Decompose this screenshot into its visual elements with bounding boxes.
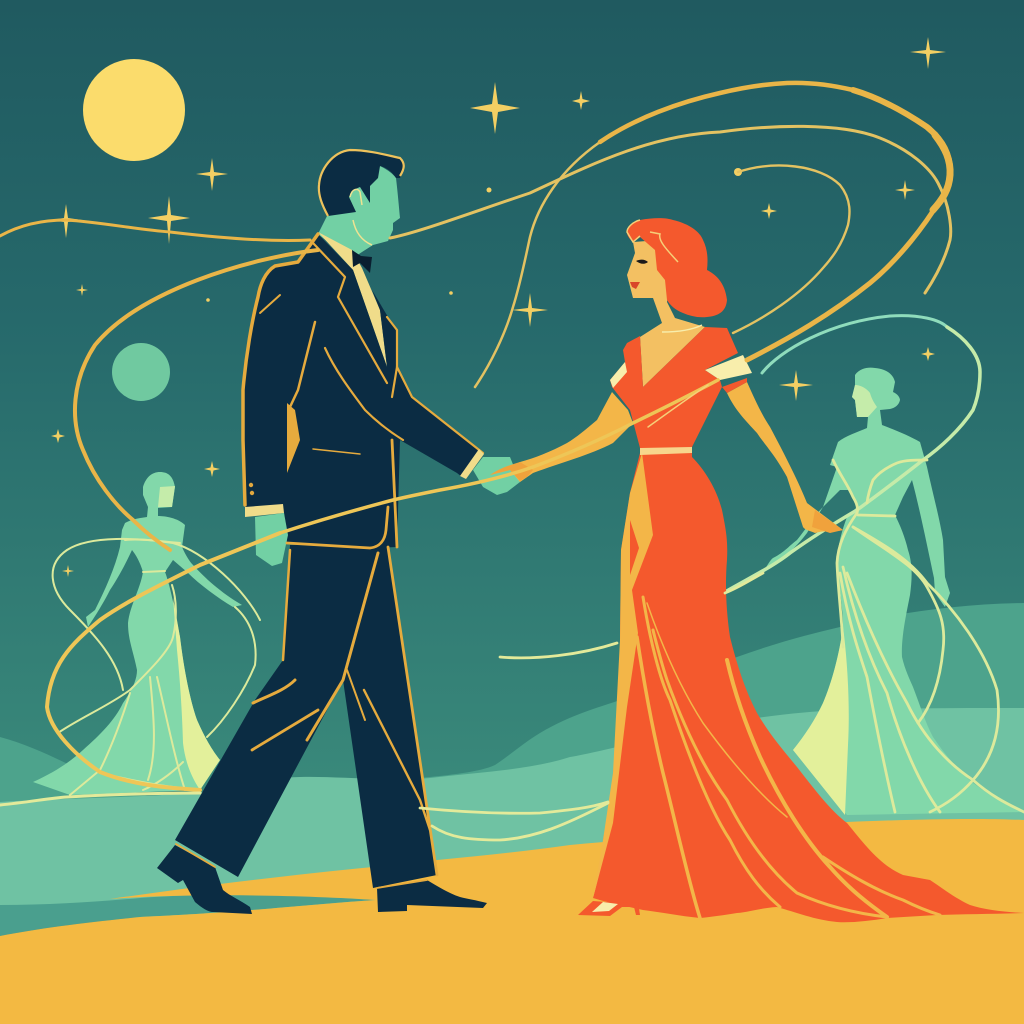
woman hair	[627, 218, 727, 317]
man trousers	[175, 545, 437, 888]
man neck and face	[318, 166, 400, 260]
man shirt collar	[318, 232, 387, 367]
man hands and cuff	[245, 483, 288, 566]
dress gold side panel	[593, 453, 653, 898]
woman hair highlight	[627, 220, 678, 262]
golden swirl lines	[0, 83, 951, 550]
man ear and jaw line	[350, 189, 372, 245]
man suit gold outlines	[176, 234, 483, 888]
rolling hills	[0, 603, 1024, 936]
man jacket	[243, 234, 483, 548]
woman skin: chest, neck and face	[627, 240, 705, 387]
sash	[640, 447, 692, 455]
right ghost swirl lines	[725, 316, 1024, 812]
bow tie	[352, 250, 372, 273]
woman fingers on the ghost ribbon	[812, 510, 843, 533]
man hair	[319, 150, 404, 216]
moon	[83, 59, 185, 161]
man shoes	[157, 845, 487, 914]
man hair outline	[319, 150, 404, 216]
dress red inset	[630, 520, 639, 575]
left ghost woman	[33, 472, 242, 795]
woman shoe	[578, 901, 640, 916]
sleeve cuffs	[610, 355, 752, 393]
lower cream ribbon	[0, 573, 763, 840]
woman hand over man's hand	[490, 462, 533, 481]
stars	[50, 37, 946, 577]
man clasped hand	[473, 457, 520, 495]
small mint planet	[112, 343, 170, 401]
woman dress	[593, 327, 1024, 922]
man hand cuff	[460, 449, 484, 479]
dress fold lines	[637, 597, 940, 918]
sand ground	[0, 819, 1024, 1024]
right ghost woman	[762, 368, 1023, 815]
left ghost swirl lines	[53, 539, 260, 795]
woman face details	[630, 260, 702, 332]
jacket gold vent	[287, 403, 300, 473]
main ribbon across the couple	[47, 380, 718, 790]
woman arms	[490, 382, 843, 533]
